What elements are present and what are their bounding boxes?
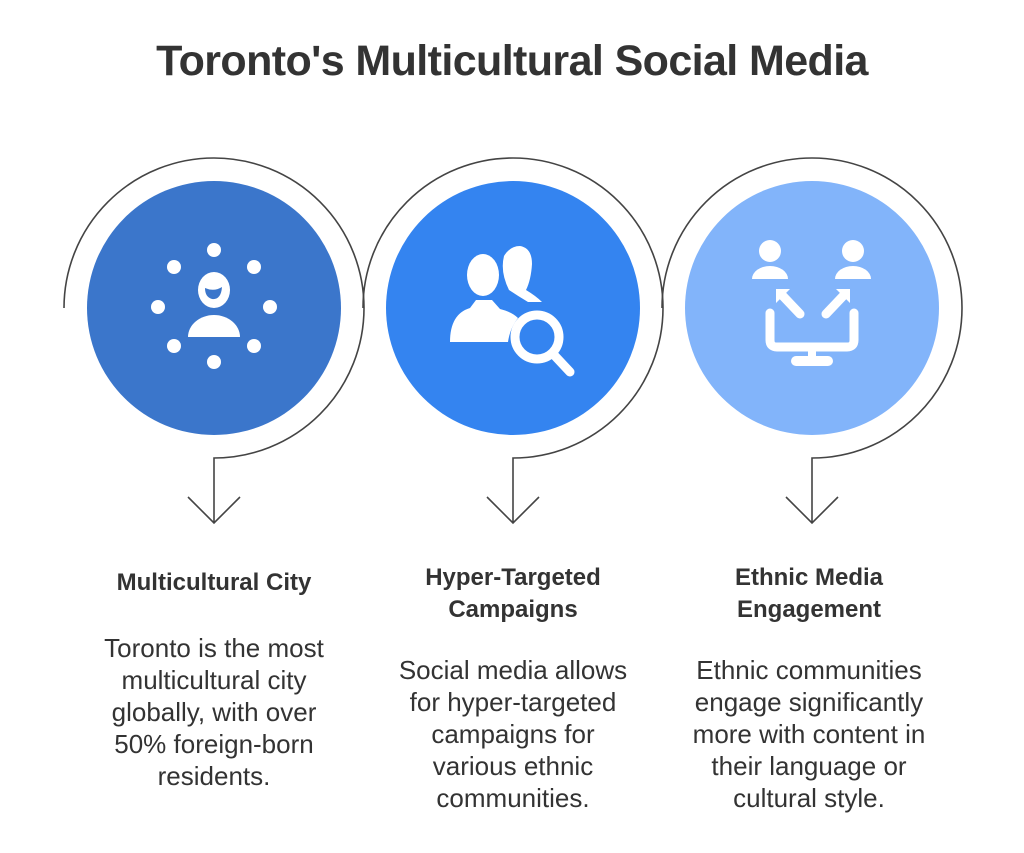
text block: Hyper-Targeted Campaigns: Hyper-Targeted [425,564,601,591]
text block: Ethnic Media Engagement: Ethnic communities [696,655,922,685]
text block: Multicultural City: 50% foreign-born [114,729,314,759]
title: Toronto's Multicultural Social Media [156,37,868,85]
text block: Ethnic Media Engagement: their language or [711,751,907,781]
text block: Multicultural City: residents. [158,761,270,791]
icon: users with magnifier [450,246,542,342]
text block: Ethnic Media Engagement: Engagement [737,596,881,623]
text block: Ethnic Media Engagement: engage significantly [695,687,923,717]
text block: Ethnic Media Engagement: Ethnic Media [735,564,883,591]
text block: Multicultural City: multicultural city [122,665,306,695]
text block: Hyper-Targeted Campaigns: various ethnic [433,751,593,781]
step 1 circle and arrow [64,158,364,523]
icon: monitor with users [752,240,871,366]
icon: person with dots [151,243,277,369]
text block: Multicultural City: Toronto is the most [104,633,324,663]
text block: Multicultural City: globally, with over [112,697,316,727]
text block: Multicultural City: Multicultural City [117,569,311,596]
text block: Ethnic Media Engagement: cultural style. [733,783,885,813]
text block: Hyper-Targeted Campaigns [399,564,627,813]
step 3 circle and arrow [662,158,962,523]
text block: Ethnic Media Engagement: more with content in [693,719,925,749]
text block: Hyper-Targeted Campaigns: campaigns for [431,719,595,749]
text block: Hyper-Targeted Campaigns: Social media allows [399,655,627,685]
text block: Hyper-Targeted Campaigns: for hyper-targeted [410,687,616,717]
text block: Hyper-Targeted Campaigns: Campaigns [448,596,578,623]
text block: Multicultural City [104,569,324,791]
step 2 circle and arrow [363,158,663,523]
text block: Ethnic Media Engagement [693,564,925,813]
text block: Hyper-Targeted Campaigns: communities. [436,783,590,813]
